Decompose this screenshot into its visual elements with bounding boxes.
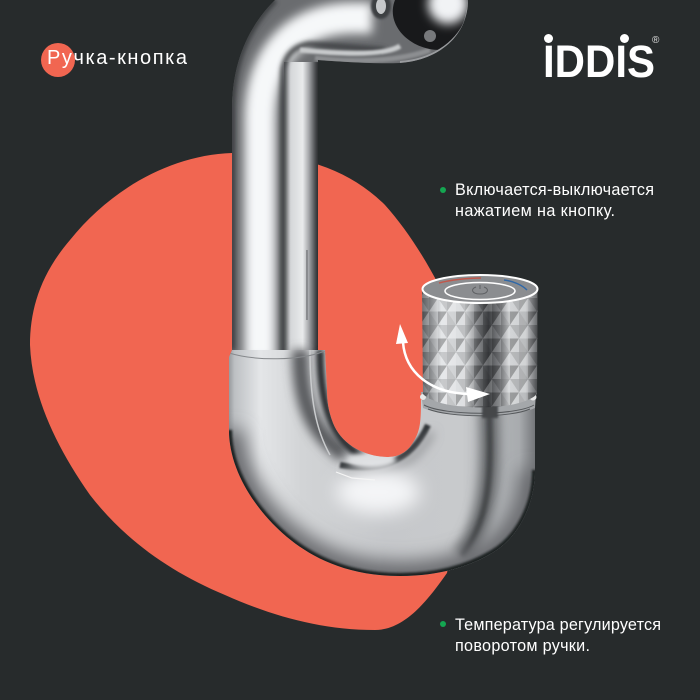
callout: temperature — [440, 616, 661, 655]
handle top cap — [422, 275, 538, 303]
power symbol — [473, 285, 487, 294]
callout: temperature: поворотом ручки. — [455, 637, 590, 655]
outer rim shade — [232, 0, 275, 350]
logo dots — [544, 34, 629, 43]
right dark band — [462, 405, 490, 556]
blue mark — [504, 280, 527, 290]
spout underside reflections — [300, 46, 400, 53]
red mark — [439, 278, 481, 283]
bullet — [440, 187, 446, 193]
handle collar — [420, 392, 536, 418]
soft shading toward outer edge — [229, 430, 535, 576]
lower bend — [225, 350, 545, 590]
power ring — [445, 282, 515, 300]
spout dark end — [393, 0, 468, 50]
callout: button — [440, 181, 654, 220]
rear neck — [284, 62, 318, 354]
heading accent circle — [41, 43, 75, 77]
logo wordmark: IDDIS — [543, 36, 655, 87]
logo: IDDIS — [543, 34, 660, 87]
coral blob — [30, 153, 480, 630]
heading text: Ручка-кнопка — [47, 47, 188, 69]
faucet body — [225, 0, 545, 590]
bullet — [440, 621, 446, 627]
arrow: rotation — [396, 324, 490, 402]
callout text: Температура регулируется — [455, 616, 661, 634]
dark seam between tubes — [283, 44, 385, 360]
handle body with diamond facets — [422, 291, 538, 408]
heading: Ручка-кнопка — [41, 43, 188, 77]
logo registered mark: ® — [652, 35, 660, 46]
faucet — [225, 0, 545, 590]
callout text: Включается-выключается — [455, 181, 654, 199]
upper tube highlight — [260, 18, 372, 360]
callout: button: нажатием на кнопку. — [455, 202, 615, 220]
